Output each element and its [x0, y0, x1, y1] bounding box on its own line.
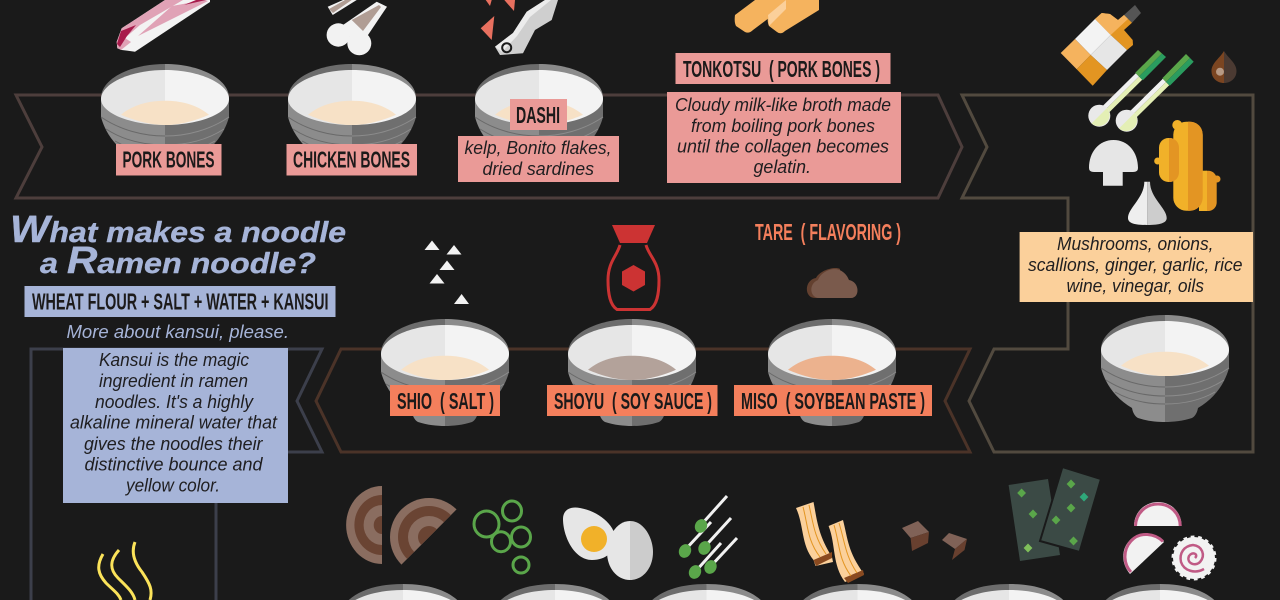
- label: chicken bones: CHICKEN BONES: [293, 146, 410, 172]
- icon: soy sauce bottle: [608, 225, 659, 310]
- label: noodle formula: WHEAT FLOUR + SALT + WATER + KANSUI: [32, 288, 328, 314]
- label: noodle formula: [24, 286, 336, 317]
- icon: salt crystals: [424, 240, 469, 304]
- label: tonkotsu: [676, 53, 890, 84]
- icon: bonito fish and flakes: [481, 0, 558, 55]
- label: tonkotsu: TONKOTSU ( PORK BONES ): [683, 56, 880, 82]
- icon: oil bottle: [1061, 5, 1141, 86]
- text: kansui description: Kansui is the magic: [99, 349, 250, 370]
- icon: chashu cubes: [902, 521, 967, 560]
- bowl: miso: [768, 319, 896, 426]
- title: [10, 209, 346, 282]
- frame: broth ribbon: [16, 95, 962, 198]
- text: aromatics description: wine, vinegar, oils: [1066, 275, 1204, 296]
- bowl: shoyu: [568, 319, 696, 426]
- label: miso: MISO ( SOYBEAN PASTE ): [741, 388, 925, 414]
- text: kansui description: yellow color.: [124, 474, 220, 496]
- text: dashi description: dried sardines: [482, 158, 594, 179]
- label: miso: [734, 385, 932, 416]
- text: kansui description: noodles. It's a highly: [95, 391, 255, 412]
- bowl: pork bones: [101, 64, 229, 171]
- bowl: topping 1: [349, 584, 457, 600]
- text: aromatics description: Mushrooms, onions,: [1057, 233, 1214, 254]
- text: more about kansui: More about kansui, please.: [66, 321, 289, 342]
- icon: narutomaki: [1123, 502, 1215, 579]
- label: shoyu: [547, 385, 718, 416]
- text: tonkotsu description: [667, 92, 901, 183]
- label: chicken bones: [286, 144, 417, 176]
- icon: pork slice: [117, 0, 210, 52]
- text: kansui description: distinctive bounce and: [84, 454, 263, 474]
- bowl: topping 2: [501, 584, 609, 600]
- label: pork bones: [116, 144, 222, 176]
- icon: scallions: [1088, 50, 1194, 132]
- icon: tonkotsu blocks: [735, 0, 819, 33]
- frame: noodle panel: [31, 349, 322, 600]
- label: shoyu: SHOYU ( SOY SAUCE ): [554, 388, 712, 414]
- label: shio: [390, 385, 500, 416]
- text: tonkotsu description: from boiling pork bones: [691, 115, 875, 136]
- label: dashi: [510, 99, 567, 130]
- text: kansui description: [63, 348, 288, 503]
- text: tonkotsu description: until the collagen becomes: [677, 136, 889, 156]
- bowl: topping 4: [803, 584, 912, 600]
- bowl: dashi: [475, 64, 603, 171]
- icon: green onion rings: [474, 501, 530, 573]
- icon: nori sheets: [1009, 467, 1101, 561]
- text: kansui description: ingredient in ramen: [99, 370, 248, 391]
- bowl: topping 6: [1106, 584, 1214, 600]
- icon: ginger: [1154, 120, 1220, 211]
- bowl: topping 5: [955, 584, 1063, 600]
- text: kansui description: alkaline mineral water that: [70, 412, 278, 432]
- label: pork bones: PORK BONES: [122, 146, 214, 172]
- label: dashi: DASHI: [516, 102, 560, 128]
- text: aromatics description: scallions, ginger, garlic, rice: [1028, 254, 1242, 275]
- text: dashi description: kelp, Bonito flakes,: [464, 137, 612, 158]
- title: a Ramen noodle?: [40, 240, 316, 282]
- bowl: topping 3: [652, 584, 761, 600]
- frame: tare ribbon: [316, 349, 970, 452]
- icon: noodle steam: [99, 542, 151, 600]
- bowl: chicken bones: [288, 64, 416, 171]
- icon: fish cake halves: [346, 482, 457, 565]
- icon: bamboo shoots: [796, 502, 864, 583]
- icon: sprouts: [677, 496, 737, 581]
- text: tonkotsu description: gelatin.: [754, 156, 811, 177]
- text: tonkotsu description: Cloudy milk-like broth made: [675, 94, 891, 115]
- icon: soft boiled egg: [563, 507, 653, 580]
- title: What makes a noodle: [10, 209, 346, 251]
- icon: miso paste: [807, 268, 858, 298]
- icon: garlic: [1128, 182, 1167, 225]
- bowl: aromatics: [1101, 315, 1229, 422]
- icon: soy drop: [1212, 51, 1236, 83]
- label: tare: TARE ( FLAVORING ): [755, 219, 901, 245]
- icon: mushroom: [1089, 140, 1138, 186]
- text: kansui description: gives the noodles their: [84, 433, 263, 454]
- icon: chicken bones: [327, 0, 387, 55]
- text: dashi description: [458, 136, 619, 182]
- frame: aromatics panel: [962, 95, 1253, 452]
- bowl: shio: [381, 319, 509, 426]
- label: shio: SHIO ( SALT ): [397, 388, 494, 414]
- text: aromatics description: [1020, 232, 1253, 302]
